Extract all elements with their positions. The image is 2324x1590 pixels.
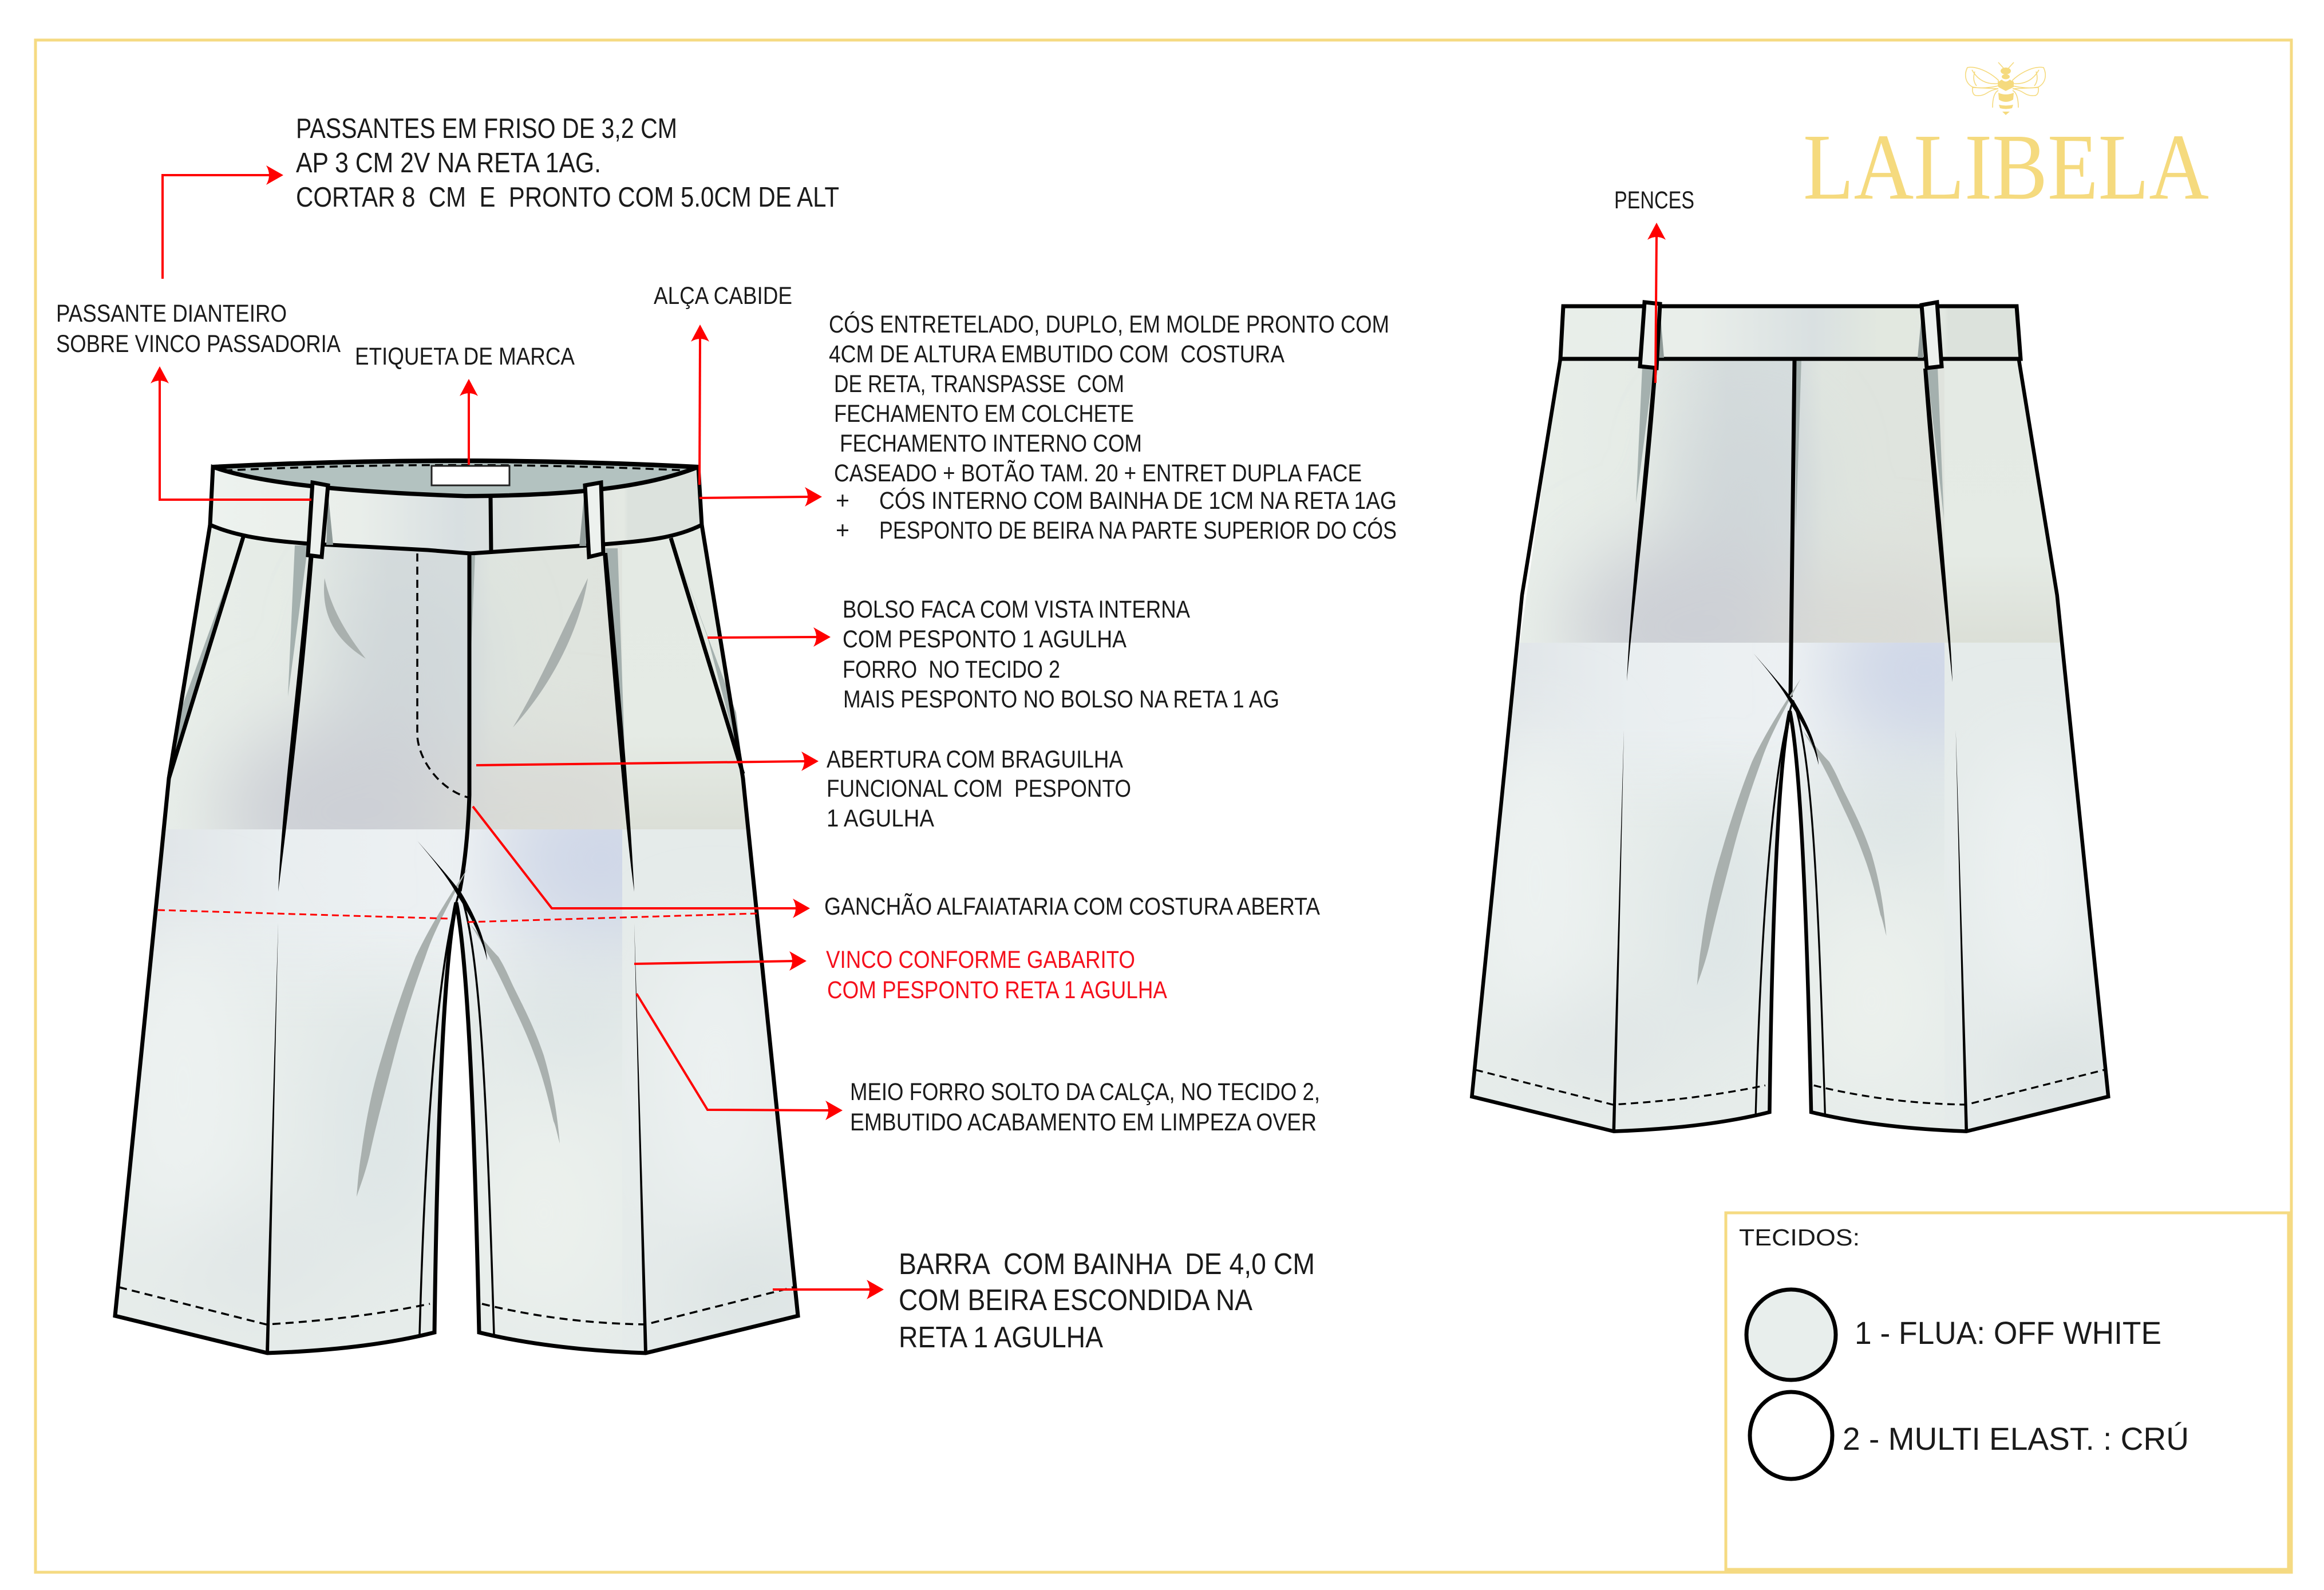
arrow: fly to abertura (476, 752, 819, 771)
annotation: passante dianteiro: PASSANTE DIANTEIRO (56, 300, 287, 327)
annotation: bolso: BOLSO FACA COM VISTA INTERNA (843, 596, 1190, 623)
annotation: cós: DE RETA, TRANSPASSE COM (834, 370, 1124, 398)
annotation: cós: CÓS ENTRETELADO, DUPLO, EM MOLDE PRONTO COM (829, 311, 1389, 338)
back pleats (1627, 369, 1953, 682)
arrow: passante to passantes text (163, 165, 283, 279)
annotation: cós: 4CM DE ALTURA EMBUTIDO COM COSTURA (829, 341, 1284, 368)
annotation: barra: BARRA COM BAINHA DE 4,0 CM (899, 1248, 1315, 1281)
arrow: pocket to bolso (708, 627, 831, 647)
annotation: abertura (827, 746, 1131, 832)
waistband shadows (326, 492, 586, 546)
label 1: 1 - FLUA: OFF WHITE (1855, 1315, 2161, 1351)
arrow: waistband to cós (699, 487, 822, 507)
front view shorts (113, 458, 800, 1355)
annotation: bolso: COM PESPONTO 1 AGULHA (843, 626, 1127, 653)
brand label (432, 466, 509, 485)
tecidos panel border (1726, 1213, 2289, 1569)
tecidos heading: TECIDOS: (1739, 1224, 1860, 1251)
annotation: passantes text (296, 113, 839, 213)
annotation: cós (829, 311, 1397, 544)
annotation: barra (899, 1248, 1315, 1354)
icon: bee (1966, 62, 2045, 115)
back belt loops (1640, 302, 1942, 368)
back waistband (1560, 306, 2021, 359)
annotation: bolso: FORRO NO TECIDO 2 (843, 656, 1060, 683)
annotation: passantes text: CORTAR 8 CM E PRONTO COM 5.0CM DE ALT (296, 182, 839, 213)
annotation: barra: COM BEIRA ESCONDIDA NA (899, 1284, 1252, 1317)
front fabric fill (117, 528, 796, 1351)
front waistband (210, 467, 702, 553)
brand name: LALIBELA (1803, 114, 2209, 219)
annotation: ganchão: GANCHÃO ALFAIATARIA COM COSTURA ABERTA (824, 893, 1320, 920)
front waist belt loops (308, 482, 603, 557)
annotation: meio forro (850, 1078, 1320, 1136)
annotation: vinco: COM PESPONTO RETA 1 AGULHA (827, 976, 1167, 1004)
arrow: leg to meio forro (637, 994, 843, 1120)
annotation: bolso: MAIS PESPONTO NO BOLSO NA RETA 1 AG (843, 686, 1279, 713)
front legs (115, 525, 798, 1353)
back view shorts (1470, 300, 2110, 1133)
annotation: vinco (826, 946, 1167, 1004)
annotation: cós: + (836, 487, 849, 515)
annotation: vinco: VINCO CONFORME GABARITO (826, 946, 1135, 974)
back fabric fill (1474, 361, 2106, 1130)
arrow: pleat to pences (1647, 223, 1666, 383)
arrow: label to etiqueta de marca (460, 379, 478, 465)
annotation: passante dianteiro: SOBRE VINCO PASSADORIA (56, 330, 341, 358)
front pocket lines (169, 535, 743, 778)
annotation: pences: PENCES (1614, 187, 1694, 214)
annotation: cós: PESPONTO DE BEIRA NA PARTE SUPERIOR DO CÓS (879, 517, 1397, 544)
front center seam (460, 553, 469, 891)
annotation: cós: FECHAMENTO INTERNO COM (840, 430, 1142, 457)
annotation: barra: RETA 1 AGULHA (899, 1321, 1103, 1354)
dashed crease guide line (158, 910, 757, 922)
annotation: passante dianteiro (56, 300, 341, 358)
back pleat shadows (1636, 359, 1944, 537)
annotation: passantes text: PASSANTES EM FRISO DE 3,2 CM (296, 113, 677, 144)
annotation: bolso (843, 596, 1279, 713)
arrow: waist to alça cabide (691, 325, 709, 485)
arrow: hem to barra (773, 1280, 884, 1299)
arrow: belt loop to passante dianteiro (151, 366, 311, 500)
arrow: crotch to ganchão (473, 806, 810, 918)
swatch 1: off white (1746, 1290, 1836, 1380)
swatch 2: crú (1750, 1392, 1832, 1479)
annotation: etiqueta de marca: ETIQUETA DE MARCA (355, 343, 575, 370)
annotation: alça cabide: ALÇA CABIDE (654, 282, 792, 310)
back waistband shadows (1659, 310, 1923, 358)
front inner waist stitching (224, 465, 687, 470)
annotation: abertura: FUNCIONAL COM PESPONTO (827, 775, 1131, 802)
annotation: cós: + (836, 517, 849, 544)
front fly dashed stitching (417, 553, 468, 797)
logo: Lalibela (1803, 62, 2209, 219)
annotation: passantes text: AP 3 CM 2V NA RETA 1AG. (296, 148, 601, 179)
front pleats (278, 553, 634, 892)
front drape folds (324, 578, 588, 727)
back legs (1472, 359, 2108, 1132)
front waist inner lining (213, 461, 698, 496)
annotation: cós: CÓS INTERNO COM BAINHA DE 1CM NA RETA 1AG (879, 487, 1397, 515)
back center seam (1791, 359, 1795, 697)
annotation: abertura: 1 AGULHA (827, 805, 934, 832)
annotation: cós: FECHAMENTO EM COLCHETE (834, 400, 1134, 428)
annotation: abertura: ABERTURA COM BRAGUILHA (827, 746, 1123, 773)
annotation: cós: CASEADO + BOTÃO TAM. 20 + ENTRET DUPLA FACE (834, 460, 1362, 487)
annotation: meio forro: MEIO FORRO SOLTO DA CALÇA, NO TECIDO 2, (850, 1078, 1320, 1106)
panel: tecidos (1726, 1213, 2289, 1569)
annotation: meio forro: EMBUTIDO ACABAMENTO EM LIMPEZA OVER (850, 1109, 1317, 1136)
front pocket shadows and pleat shadows (171, 545, 743, 772)
label 2: 2 - MULTI ELAST. : CRÚ (1843, 1421, 2189, 1457)
arrow: crease to vinco (634, 951, 807, 971)
